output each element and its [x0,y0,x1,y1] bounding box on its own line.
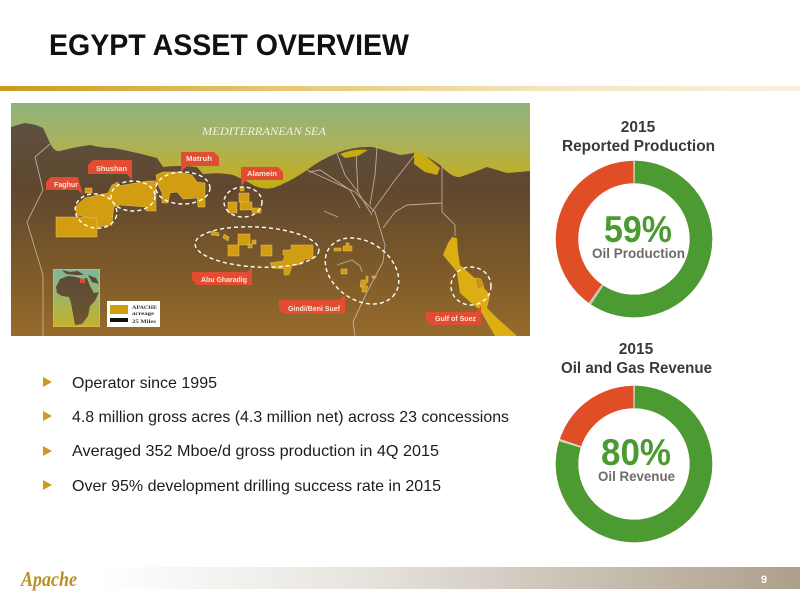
map land [11,123,530,336]
callout: Matruh [181,152,219,172]
chart heading: Reported Production [562,138,715,155]
title: EGYPT ASSET OVERVIEW [49,29,410,62]
panel: reported production chart [562,119,715,306]
callout: Faghur: Faghur [54,180,78,189]
map sea [11,103,530,336]
callout: Faghur [46,177,83,195]
inset map of Africa [54,270,100,326]
legend [107,301,160,327]
chart heading: 2015 [619,341,654,358]
bullet: operator: Operator since 1995 [72,375,217,392]
Apache acreage blocks [56,172,484,292]
callout: Gindi/Beni Suef [279,295,345,314]
callout: Abu Gharadig: Abu Gharadig [201,275,247,284]
gold header rule [0,86,800,91]
donut label: Oil Production [592,246,685,261]
callout: Gindi/Beni Suef: Gindi/Beni Suef [288,304,341,313]
chart heading: Oil and Gas Revenue [561,360,712,377]
coastal lakes and delta pale [414,151,440,175]
callout: Matruh: Matruh [186,154,212,163]
panel: map of Egypt [11,103,530,336]
callout: Abu Gharadig [192,267,252,285]
bullet: drilling: Over 95% development drilling success rate in 2015 [72,478,441,495]
callout: Alamein: Alamein [247,169,277,178]
legend: APACHE [132,305,157,311]
Gulf of Suez [443,237,517,336]
bullet: acreage: 4.8 million gross acres (4.3 million net) across 23 concessions [72,409,509,426]
chart heading [562,119,715,155]
donut label: Oil Revenue [598,469,675,484]
callout: Gulf of Suez [426,306,481,325]
sea label: MEDITERRANEAN SEA [201,126,327,138]
callout: Shushan [88,160,132,180]
legend: 25 Miles [132,319,156,325]
bullet list [43,375,509,495]
dashed field outlines [72,172,491,318]
footer bar [100,567,800,589]
chart heading [561,341,712,377]
callout: Shushan: Shushan [96,164,127,173]
Nile delta and canals [27,144,455,336]
callout: Gulf of Suez: Gulf of Suez [435,314,476,323]
logo: Apache: Apache [19,567,77,591]
legend: acreage [132,311,155,317]
percentage: 59% [604,209,672,250]
bullet: production: Averaged 352 Mboe/d gross production in 4Q 2015 [72,443,439,460]
panel: oil and gas revenue chart [561,341,712,531]
donut chart [567,172,701,306]
chart heading: 2015 [621,119,656,136]
donut chart [567,397,701,531]
page number: 9 [761,574,767,586]
percentage: 80% [601,432,671,473]
callout: Alamein [241,167,283,186]
